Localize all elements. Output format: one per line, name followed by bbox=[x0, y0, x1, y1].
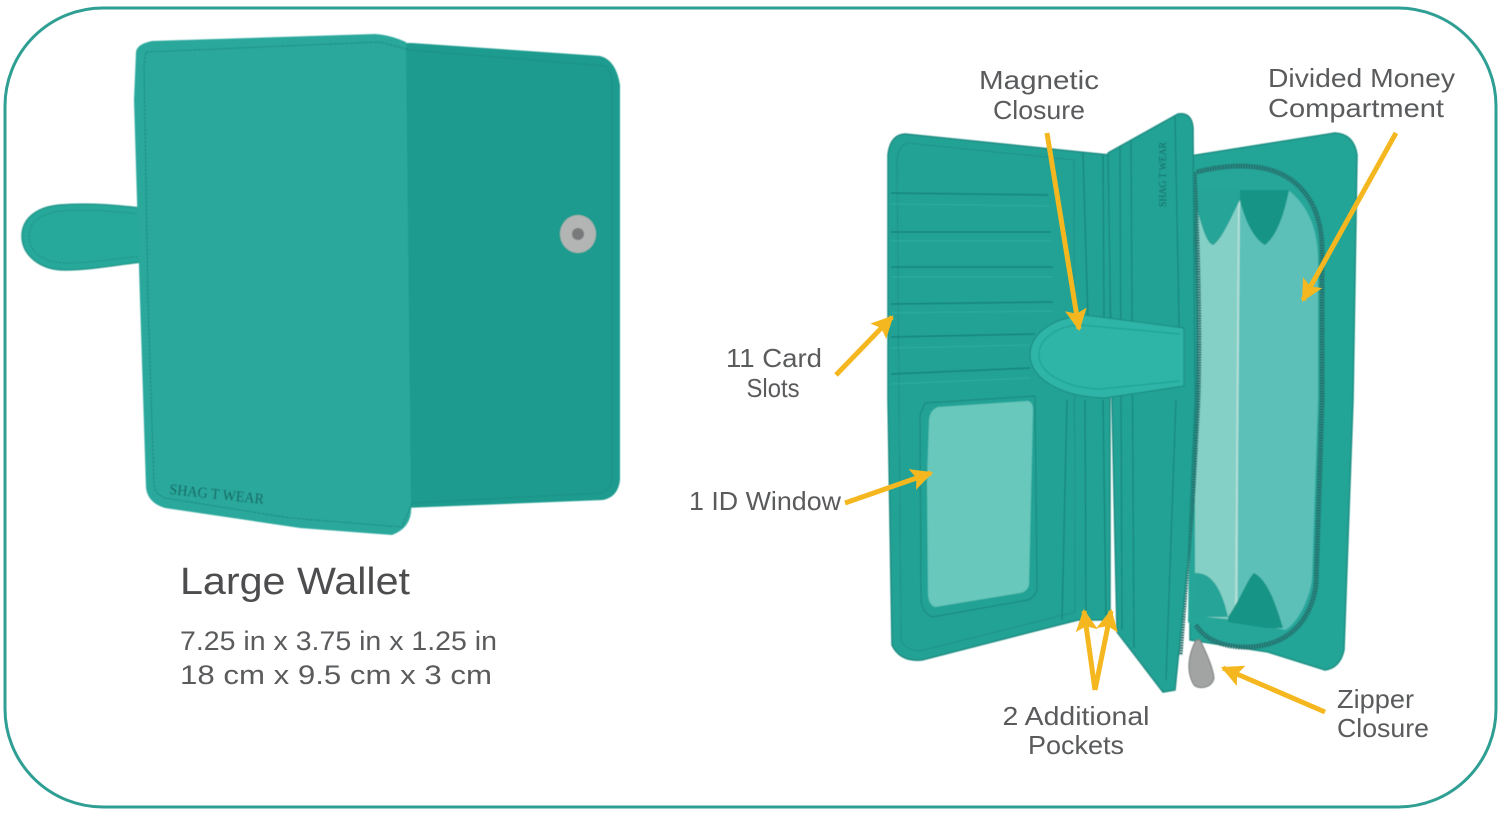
label: 11 Card Slots: Slots bbox=[746, 373, 800, 403]
label: 2 Additional Pockets: Pockets bbox=[1028, 730, 1124, 760]
label: 2 Additional Pockets: 2 Additional bbox=[1002, 701, 1150, 731]
label: Divided Money Compartment bbox=[1268, 63, 1455, 123]
label: Magnetic Closure: Closure bbox=[993, 95, 1085, 125]
arrow: Magnetic Closure bbox=[1047, 133, 1079, 329]
ID window bbox=[927, 401, 1033, 607]
zipper pull bbox=[1189, 640, 1214, 688]
label: Zipper Closure bbox=[1337, 684, 1429, 743]
label: Divided Money Compartment: Divided Money bbox=[1268, 63, 1455, 93]
card slot panel bbox=[888, 134, 1110, 660]
stitching line bbox=[144, 42, 612, 527]
folded inner flap bbox=[1108, 114, 1195, 692]
closure tab bbox=[1030, 315, 1184, 398]
label: Divided Money Compartment: Compartment bbox=[1268, 93, 1445, 123]
arrow: Divided Money Compartment bbox=[1303, 133, 1396, 300]
label: Magnetic Closure: Magnetic bbox=[979, 65, 1099, 95]
open wallet illustration bbox=[888, 114, 1357, 692]
label: Zipper Closure: Closure bbox=[1337, 713, 1429, 743]
top pleats bbox=[1195, 190, 1289, 245]
right panel exterior bbox=[1190, 133, 1357, 670]
heading: Large Wallet: Large Wallet bbox=[180, 561, 410, 603]
wallet front panel bbox=[134, 34, 411, 535]
arrows: 2 Additional Pockets bbox=[1084, 611, 1111, 690]
magnetic snap button bbox=[560, 215, 596, 253]
arrow: 1 ID Window bbox=[845, 473, 931, 503]
dimensions text: 7.25 in x 3.75 in x 1.25 in bbox=[180, 626, 497, 656]
flap logo: SHAG T WEAR bbox=[1157, 141, 1169, 207]
arrow: Zipper Closure bbox=[1223, 668, 1325, 712]
bottom pleats bbox=[1193, 573, 1283, 628]
label: 11 Card Slots bbox=[726, 343, 822, 403]
wallet back panel bbox=[404, 43, 620, 508]
money compartment right side bbox=[1238, 190, 1318, 630]
card slot lines bbox=[891, 193, 1053, 384]
dimensions text bbox=[180, 626, 497, 690]
label: 11 Card Slots: 11 Card bbox=[726, 343, 822, 373]
closed wallet illustration bbox=[22, 34, 620, 535]
closure tab stitch bbox=[1039, 325, 1180, 389]
centre spine pockets bbox=[1062, 153, 1106, 620]
label: 2 Additional Pockets bbox=[1002, 701, 1150, 760]
arrow: 11 Card Slots bbox=[836, 317, 892, 375]
zipper teeth bbox=[1180, 166, 1322, 655]
zipper compartment lining bbox=[1188, 166, 1322, 647]
label: Zipper Closure: Zipper bbox=[1337, 684, 1414, 714]
ID window pocket border bbox=[920, 396, 1037, 617]
brand logo: SHAG T WEAR bbox=[169, 482, 265, 508]
flap fold lines bbox=[1120, 116, 1180, 680]
divider centre line bbox=[1236, 198, 1239, 617]
money compartment left side bbox=[1195, 190, 1238, 620]
wallet strap tab bbox=[22, 204, 142, 270]
inner stitch line bbox=[897, 143, 1075, 651]
label: 1 ID Window: 1 ID Window bbox=[689, 486, 841, 516]
label: Magnetic Closure bbox=[979, 65, 1099, 125]
dimensions text: 18 cm x 9.5 cm x 3 cm bbox=[180, 660, 492, 690]
